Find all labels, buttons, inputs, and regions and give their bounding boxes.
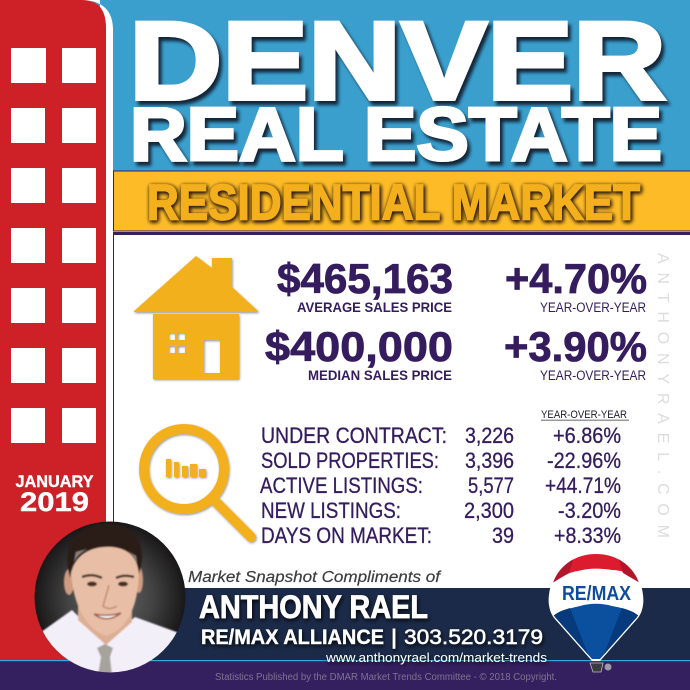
row: sold properties: SOLD PROPERTIES: (261, 448, 439, 473)
contact: website: www.anthonyrael.com/market-trends (325, 651, 547, 665)
row: active listings: +44.71% (545, 473, 621, 498)
date label: JANUARY (16, 472, 94, 491)
stat: median sales price: $400,000 (265, 323, 453, 370)
grey temples (72, 549, 138, 572)
header background (92, 0, 690, 171)
date label: 2019 (20, 487, 89, 517)
contact: name: ANTHONY RAEL (199, 589, 428, 625)
logo: balloon (545, 550, 647, 672)
row: new listings: NEW LISTINGS: (261, 498, 401, 523)
column heading: YEAR-OVER-YEAR (541, 409, 627, 421)
watermark: ANTHONYRAEL.COM (654, 253, 671, 538)
icon: house (134, 256, 258, 379)
photo: agent portrait (34, 522, 186, 672)
panel: contact band (150, 588, 690, 660)
balloon wordmark: RE/MAX (562, 583, 632, 605)
date label (16, 472, 94, 517)
row: under contract (261, 423, 621, 448)
row: days on market: +8.33% (554, 523, 621, 548)
row: under contract: 3,226 (465, 423, 514, 448)
stat: average year over year: +4.70% (505, 255, 647, 302)
row: days on market: 39 (492, 523, 514, 548)
icon: magnifier (144, 429, 251, 537)
stat: average sales price: AVERAGE SALES PRICE (297, 299, 452, 315)
row: new listings: 2,300 (464, 498, 514, 523)
banner: residential market (113, 171, 690, 588)
title: Denver: DENVER (129, 0, 666, 123)
row: under contract: +6.86% (553, 423, 621, 448)
building windows (11, 48, 96, 443)
table: market statistics (260, 409, 629, 548)
stat: average sales price: $465,163 (277, 255, 453, 302)
eyes (87, 582, 97, 586)
row: sold properties: 3,396 (465, 448, 514, 473)
panel: red building (0, 0, 106, 660)
balloon red crown (553, 554, 638, 582)
row: sold properties: -22.96% (547, 448, 621, 473)
row: active listings (260, 473, 621, 498)
registered mark (604, 664, 612, 670)
row: new listings: -3.20% (558, 498, 621, 523)
contact: office and phone: | (391, 625, 397, 649)
brows (82, 575, 134, 578)
stat: median year over year: +3.90% (504, 323, 647, 370)
shirt (42, 609, 178, 672)
neck (78, 600, 132, 645)
face (71, 543, 139, 636)
stat: median year over year: YEAR-OVER-YEAR (540, 368, 646, 383)
stat: median sales price: MEDIAN SALES PRICE (308, 367, 452, 383)
title: Real Estate: REAL ESTATE (130, 92, 662, 176)
row: active listings: 5,577 (468, 473, 514, 498)
nose (103, 585, 117, 608)
row: under contract: UNDER CONTRACT: (261, 423, 447, 448)
balloon blue base (552, 604, 640, 660)
row: active listings: ACTIVE LISTINGS: (260, 473, 423, 498)
ears (64, 569, 74, 595)
footer band (0, 660, 690, 690)
balloon basket (590, 663, 603, 672)
stat: average year over year: YEAR-OVER-YEAR (540, 300, 646, 315)
mini bars (166, 459, 206, 477)
white gutter (84, 0, 113, 588)
row: sold properties (261, 448, 621, 473)
smile (94, 613, 121, 619)
compliments line: Market Snapshot Compliments of (188, 569, 442, 586)
contact: office and phone (201, 625, 543, 649)
tie (97, 644, 113, 675)
hair (67, 524, 142, 578)
row: days on market (261, 523, 621, 548)
row: days on market: DAYS ON MARKET: (261, 523, 432, 548)
row: new listings (261, 498, 621, 523)
contact: office and phone: RE/MAX ALLIANCE (201, 625, 384, 649)
contact: office and phone: 303.520.3179 (404, 625, 543, 649)
footer source note: Statistics Published by the DMAR Market Trends Committee - © 2018 Copyright. (215, 672, 557, 683)
